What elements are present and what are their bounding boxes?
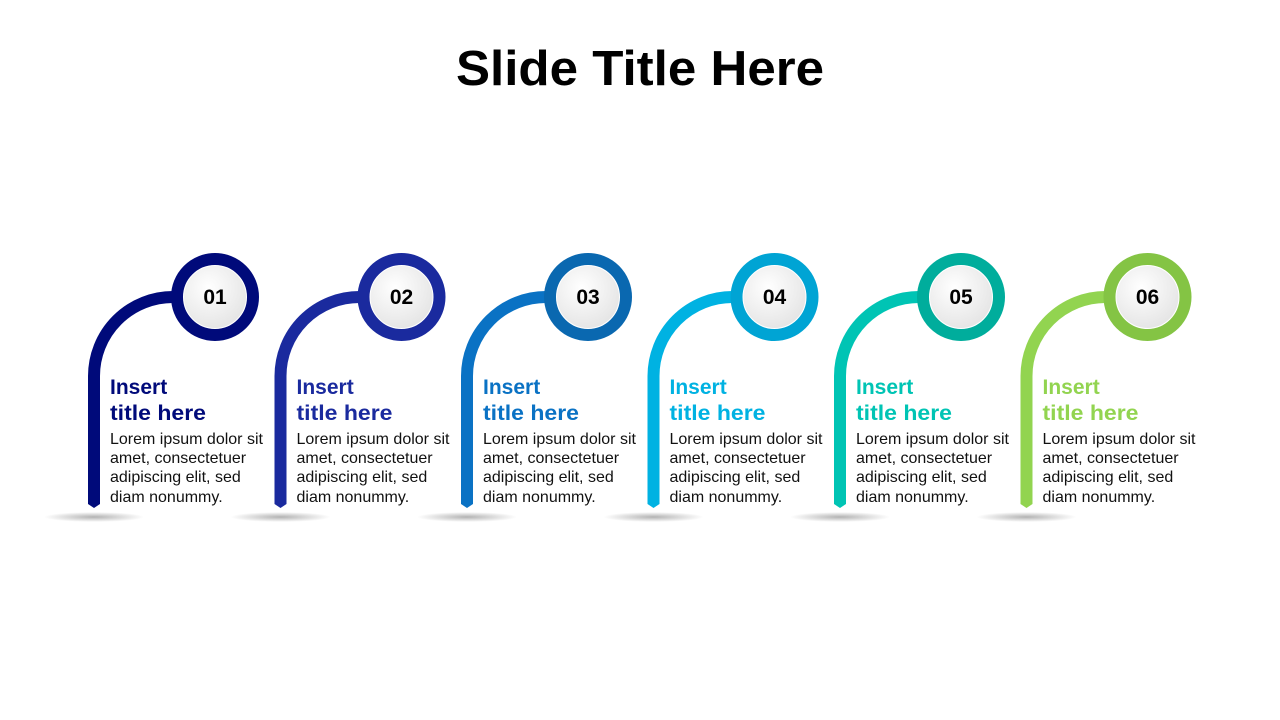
step 03: amet, consectetuer [483,450,620,467]
step 05: Insert [856,376,913,399]
step 02: diam nonummy. [296,489,409,506]
step 01: adipiscing elit, sed [110,469,241,486]
step 03: title here [483,402,579,425]
step 06 [976,259,1196,522]
step 05: diam nonummy. [856,489,969,506]
step 03: diam nonummy. [483,489,596,506]
step 02: 02 [390,286,413,309]
step 06: amet, consectetuer [1042,450,1179,467]
step 04: adipiscing elit, sed [670,469,800,486]
step 05: amet, consectetuer [856,450,993,467]
step 02: Lorem ipsum dolor sit [296,431,450,448]
step 04: 04 [763,286,786,309]
title: Slide Title Here [456,42,824,96]
step 06: Insert [1042,376,1100,399]
step 06: adipiscing elit, sed [1042,469,1173,486]
step 05: Lorem ipsum dolor sit [856,431,1010,448]
step 01: Insert [110,376,167,399]
step 06: Lorem ipsum dolor sit [1042,431,1196,448]
step 04: Insert [670,376,727,399]
step 03: Insert [483,376,540,399]
step 04: Lorem ipsum dolor sit [670,431,823,448]
step 05: title here [856,402,952,425]
step 02: Insert [296,376,354,399]
step 02: title here [296,402,392,425]
step 06: diam nonummy. [1042,489,1155,506]
step 05: adipiscing elit, sed [856,469,987,486]
step 06: title here [1042,402,1138,425]
step 05 [790,259,1010,522]
step 05: 05 [949,286,973,309]
step 06: 06 [1136,286,1159,309]
step 02 [230,259,450,522]
step 04: title here [670,402,766,425]
step 03: Lorem ipsum dolor sit [483,431,636,448]
step 01: diam nonummy. [110,489,223,506]
step 01: Lorem ipsum dolor sit [110,431,264,448]
step 04: diam nonummy. [670,489,782,506]
step 04 [604,259,823,522]
step 04: amet, consectetuer [670,450,806,467]
step 03: adipiscing elit, sed [483,469,614,486]
step 03: 03 [576,286,600,309]
step 02: adipiscing elit, sed [296,469,427,486]
step 02: amet, consectetuer [296,450,433,467]
step 01 [44,259,264,522]
step 03 [417,259,636,522]
step 01: title here [110,402,206,425]
step 01: 01 [203,286,227,309]
step 01: amet, consectetuer [110,450,247,467]
